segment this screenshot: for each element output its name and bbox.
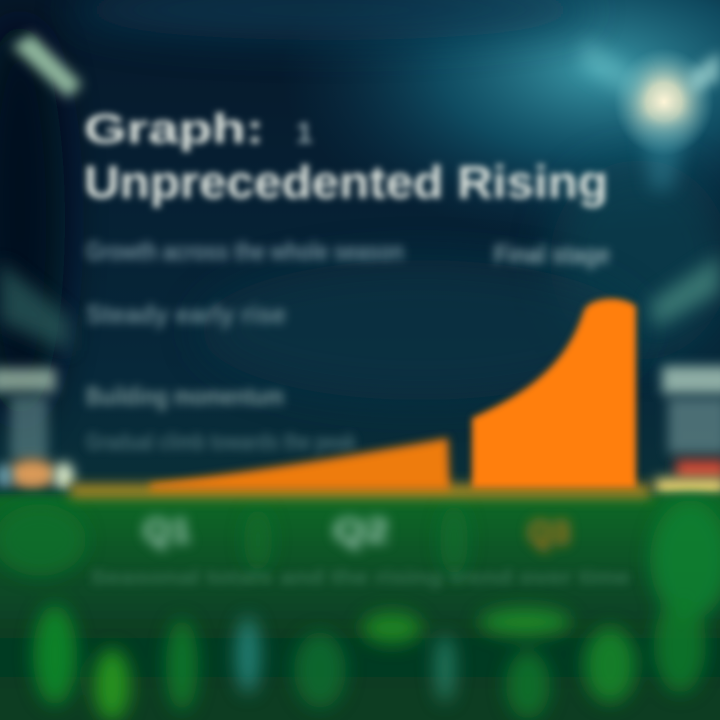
text block: note three: Gradual climb towards the peak <box>86 429 356 456</box>
title: Graph: <box>84 105 264 152</box>
axis label: second: Q2 <box>333 512 389 550</box>
pitch <box>0 494 720 720</box>
background: sky glow <box>0 0 720 420</box>
area: early segment <box>150 438 450 490</box>
text block: note one: Steady early rise <box>86 299 286 329</box>
title: 1 <box>296 117 313 150</box>
title: Unprecedented Rising <box>84 156 608 208</box>
title <box>84 105 608 208</box>
axis label: third: Q3 <box>528 514 570 552</box>
axis label: first: Q1 <box>143 512 191 550</box>
text block: subtitle right: Final stage <box>494 239 610 269</box>
icon: floodlight top left <box>12 34 82 98</box>
area: final segment <box>472 299 636 488</box>
stadium stand: left <box>0 262 74 490</box>
caption: Seasonal totals and the rising trend over time <box>90 567 630 589</box>
text block: note two: Building momentum <box>86 381 284 411</box>
stadium stand: right <box>650 255 720 496</box>
text block: subtitle left: Growth across the whole season <box>86 236 404 266</box>
baseline glow <box>70 484 650 498</box>
background: night sky <box>0 0 720 500</box>
chart: rising orange area <box>70 299 650 498</box>
icon: floodlight top right <box>580 40 720 190</box>
